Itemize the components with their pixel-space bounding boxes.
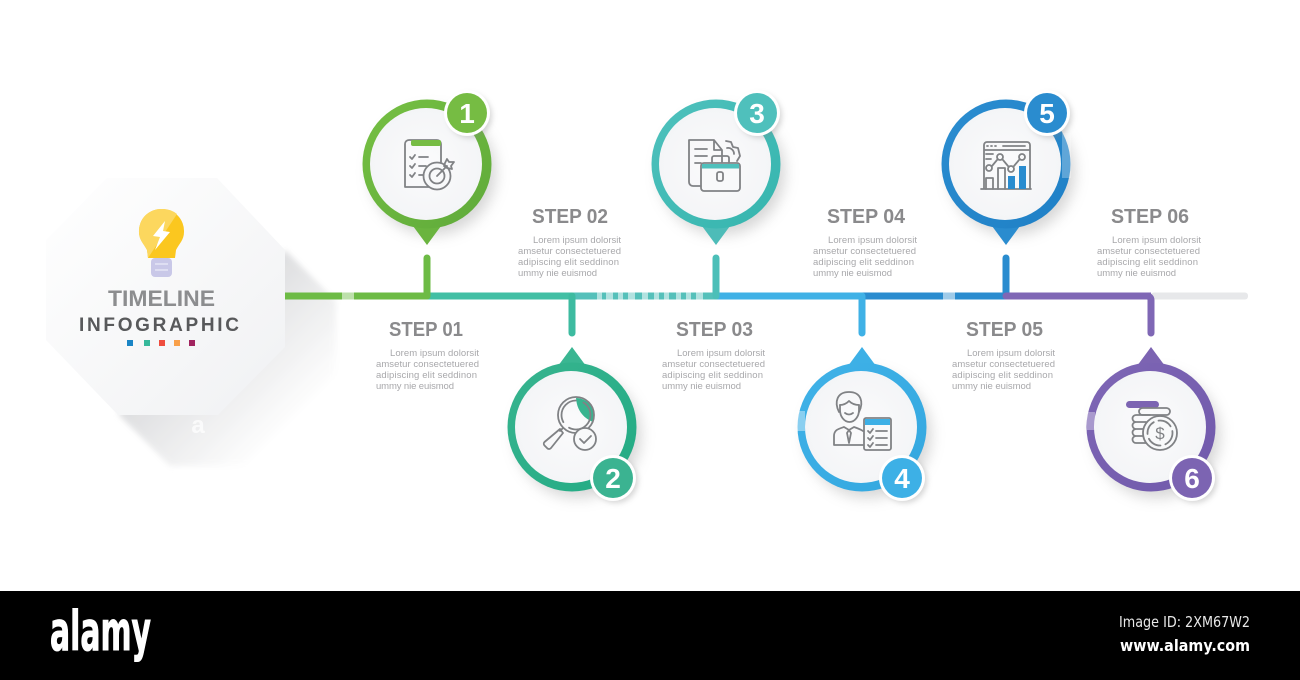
ring <box>1137 347 1165 366</box>
text block: step 02: Lorem ipsum dolorsit <box>533 235 621 246</box>
badge: 4 <box>894 463 910 494</box>
icon: person checklist <box>834 392 891 450</box>
octagon long shadow <box>118 250 336 466</box>
text block: step 06: Lorem ipsum dolorsit <box>1112 235 1201 246</box>
badge: 1 <box>459 98 475 129</box>
text block: step 04 <box>813 206 917 279</box>
text block: step 01 <box>376 319 479 392</box>
ring <box>848 347 876 366</box>
text block: step 04: adipiscing elit seddinon <box>813 257 914 268</box>
text block: step 05: adipiscing elit seddinon <box>952 370 1053 381</box>
colour squares <box>127 340 195 346</box>
heading: timeline: TIMELINE <box>108 286 215 311</box>
badge <box>444 90 492 138</box>
text block: step 05: amsetur consectetuered <box>952 359 1055 370</box>
panel: step 3 pin <box>652 90 785 296</box>
badge <box>590 455 638 503</box>
badge: 6 <box>1184 463 1200 494</box>
badge <box>1024 90 1072 138</box>
text block: step 03: amsetur consectetuered <box>662 359 765 370</box>
panel: step 4 pin <box>797 296 931 503</box>
text block: step 03: STEP 03 <box>676 319 753 341</box>
text block: step 03: ummy nie euismod <box>662 381 741 392</box>
ring <box>558 347 586 366</box>
icon: light bulb <box>139 209 184 277</box>
icon: analytics window <box>981 142 1031 189</box>
ring <box>992 226 1020 245</box>
ring <box>413 226 441 245</box>
footer logo: alamy <box>50 600 151 663</box>
stem <box>858 296 866 333</box>
stem <box>712 258 720 296</box>
text block: step 02: ummy nie euismod <box>518 268 597 279</box>
icon: magnifier check <box>544 397 596 450</box>
text block: step 02: adipiscing elit seddinon <box>518 257 619 268</box>
badge <box>734 90 782 138</box>
text block: step 01: Lorem ipsum dolorsit <box>390 348 479 359</box>
stem <box>568 296 576 333</box>
text block: step 06 <box>1097 206 1201 279</box>
text block: step 02 <box>518 206 621 279</box>
text block: step 04: STEP 04 <box>827 206 906 228</box>
timeline line <box>285 292 1248 300</box>
image id: Image ID: 2XM67W2 <box>1119 613 1250 631</box>
text block: step 06: ummy nie euismod <box>1097 268 1176 279</box>
text block: step 06: adipiscing elit seddinon <box>1097 257 1198 268</box>
icon: coins: $ <box>1155 424 1165 443</box>
website: www.alamy.com <box>1120 636 1250 655</box>
text block: step 05: ummy nie euismod <box>952 381 1031 392</box>
stem <box>1002 258 1010 296</box>
text block: step 01: STEP 01 <box>389 319 463 341</box>
text block: step 06: STEP 06 <box>1111 206 1189 228</box>
badge: 3 <box>749 98 765 129</box>
badge <box>1169 455 1217 503</box>
text block: step 04: Lorem ipsum dolorsit <box>828 235 917 246</box>
panel: title octagon: a <box>191 412 205 439</box>
text block: step 05 <box>952 319 1055 392</box>
text block: step 01: adipiscing elit seddinon <box>376 370 477 381</box>
octagon <box>46 178 285 415</box>
text block: step 01: amsetur consectetuered <box>376 359 479 370</box>
text block: step 01: ummy nie euismod <box>376 381 454 392</box>
panel: step 5 pin <box>942 90 1075 296</box>
ring <box>702 226 730 245</box>
text block: step 03: Lorem ipsum dolorsit <box>677 348 765 359</box>
footer bar <box>0 591 1300 680</box>
stem <box>1006 296 1151 333</box>
text block: step 03 <box>662 319 765 392</box>
text block: step 03: adipiscing elit seddinon <box>662 370 763 381</box>
text block: step 05: Lorem ipsum dolorsit <box>967 348 1055 359</box>
panel: step 2 pin <box>508 296 641 503</box>
text block: step 02: amsetur consectetuered <box>518 246 621 257</box>
panel: step 6 pin <box>1006 296 1220 503</box>
icon: documents briefcase <box>689 140 740 191</box>
heading: infographic: INFOGRAPHIC <box>79 315 239 336</box>
badge: 5 <box>1039 98 1055 129</box>
text block: step 06: amsetur consectetuered <box>1097 246 1200 257</box>
text block: step 02: STEP 02 <box>532 206 608 228</box>
text block: step 04: amsetur consectetuered <box>813 246 916 257</box>
badge: 2 <box>605 463 621 494</box>
icon: coins <box>1126 401 1177 450</box>
stem <box>424 258 430 296</box>
panel: step 1 pin <box>362 90 496 296</box>
badge <box>879 455 927 503</box>
icon: checklist target <box>405 140 454 190</box>
panel: title octagon <box>46 178 336 466</box>
text block: step 05: STEP 05 <box>966 319 1043 341</box>
text block: step 04: ummy nie euismod <box>813 268 892 279</box>
